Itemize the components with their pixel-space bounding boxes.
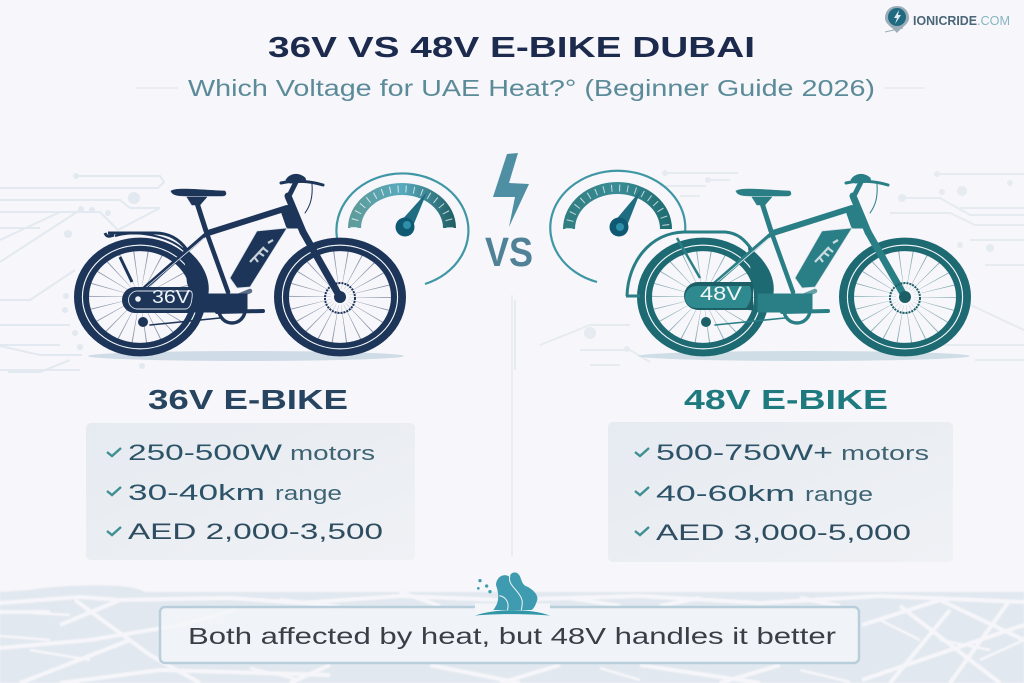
- bike: 48V: [626, 174, 970, 361]
- check: motors: [107, 448, 121, 456]
- front disc: [890, 283, 920, 313]
- spec: range: [656, 481, 873, 506]
- title: 36V VS 48V E-BIKE DUBAI: [268, 32, 755, 64]
- icon: lightning bolt: [493, 153, 529, 227]
- check: range: [635, 487, 649, 495]
- icon: heat waves: [475, 572, 550, 616]
- spec: motors: 250-500W: [128, 440, 283, 465]
- frame: [140, 174, 340, 325]
- brand name: .COM: [977, 13, 1010, 28]
- check: price: [635, 527, 649, 535]
- icon: location pin: [885, 6, 909, 33]
- spec: range: range: [275, 483, 342, 505]
- VS label: VS: [485, 229, 533, 275]
- map pattern at bottom: [0, 585, 1024, 683]
- chain guard with 36V: [122, 286, 193, 313]
- brand name: IONICRIDE: [913, 13, 977, 28]
- chain guard with 36V: 36V: [152, 286, 191, 307]
- spec: motors: [656, 440, 929, 465]
- gauge: left: [336, 173, 468, 284]
- chain guard with 48V: [684, 282, 753, 310]
- front wheel: [278, 241, 402, 353]
- heading: 48V: 48V E-BIKE: [684, 384, 888, 415]
- spec: range: 30-40km: [128, 480, 265, 505]
- bike: 36V: [78, 174, 404, 361]
- rear fender and rack: [626, 232, 774, 312]
- rear fender and rack: [105, 233, 209, 312]
- spec: price: AED 3,000-5,000: [656, 520, 911, 545]
- logo: [885, 6, 1010, 33]
- rear wheel: [78, 241, 202, 353]
- front wheel: [843, 241, 967, 353]
- front disc: [325, 283, 355, 313]
- spec: motors: [128, 440, 375, 465]
- check: motors: [635, 448, 649, 456]
- rear derailleur: [138, 317, 148, 327]
- spec: range: 40-60km: [656, 481, 795, 506]
- subtitle: Which Voltage for UAE Heat?° (Beginner Guide 2026): [188, 75, 875, 101]
- circuit pattern: right: [515, 170, 1024, 370]
- circuit pattern: left: [0, 173, 164, 372]
- rear derailleur: [701, 317, 711, 327]
- spec: range: range: [805, 484, 873, 506]
- callout banner: [160, 607, 859, 663]
- chain guard with 48V: 48V: [700, 284, 742, 305]
- frame: [705, 174, 905, 325]
- panel: 48V specs: [608, 422, 953, 562]
- spec: motors: motors: [841, 443, 929, 465]
- brand name: [913, 13, 1010, 28]
- gauge: right: [550, 171, 685, 282]
- ground shadow: [88, 351, 404, 361]
- banner text: Both affected by heat, but 48V handles it better: [188, 623, 836, 649]
- rear wheel: [641, 241, 765, 353]
- ground shadow: [638, 351, 970, 361]
- check: range: [107, 487, 121, 495]
- heading: 36V: 36V E-BIKE: [148, 384, 348, 415]
- spec: range: [128, 480, 342, 505]
- spec: price: AED 2,000-3,500: [128, 519, 383, 544]
- center divider: [511, 295, 513, 556]
- check: price: [107, 527, 121, 535]
- spec: motors: motors: [290, 443, 375, 465]
- spec: motors: 500-750W+: [656, 440, 833, 465]
- panel: 36V specs: [86, 423, 415, 560]
